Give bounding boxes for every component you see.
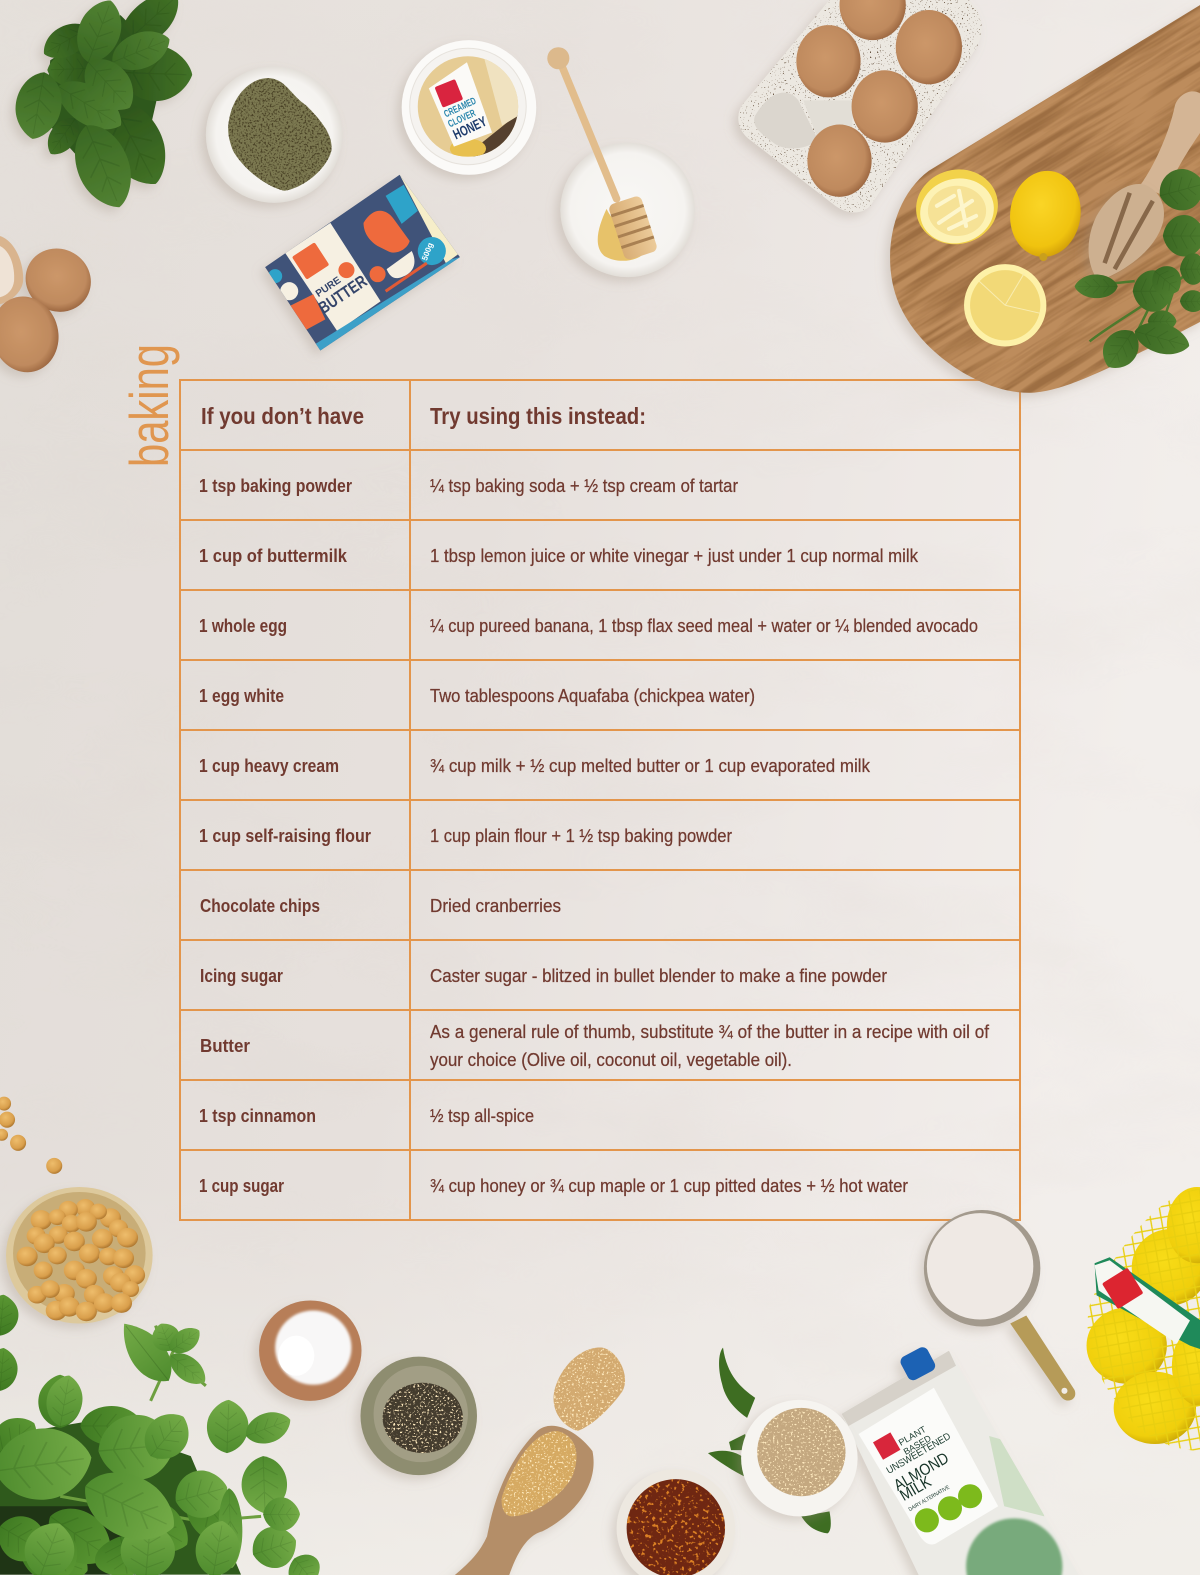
wooden citrus juicer	[1089, 91, 1200, 281]
row: egg white	[199, 686, 755, 706]
row: chocolate chips: Chocolate chips	[200, 896, 320, 916]
unsweetened almond milk carton: MILK	[897, 1472, 935, 1505]
substitution table	[180, 380, 1020, 1220]
creamed clover honey tub: CREAMED	[442, 96, 478, 120]
bowl of chilli flakes	[617, 1469, 735, 1575]
pure butter box: BUTTER	[315, 272, 371, 318]
unsweetened almond milk carton: PLANT	[897, 1424, 928, 1448]
row: self-raising flour: 1 cup plain flour + 1 ½ tsp baking powder	[430, 826, 732, 846]
row: sugar: 1 cup sugar	[199, 1176, 284, 1196]
unsweetened almond milk carton	[838, 1347, 1065, 1575]
row: whole egg	[199, 616, 978, 636]
row: buttermilk: 1 tbsp lemon juice or white vinegar + just under 1 cup normal milk	[430, 546, 919, 566]
squeezed lemon half	[908, 160, 1006, 253]
green chillies	[708, 1348, 831, 1533]
row: whole egg: ¼ cup pureed banana, 1 tbsp flax seed meal + water or ¼ blended avocado	[430, 616, 978, 636]
row: sugar	[199, 1176, 908, 1196]
row: butter: Butter	[200, 1036, 250, 1056]
row: whole egg: 1 whole egg	[199, 616, 287, 636]
row: butter	[200, 1022, 990, 1070]
unsweetened almond milk carton: ALMOND	[891, 1449, 952, 1495]
row: self-raising flour: 1 cup self-raising flour	[199, 826, 371, 846]
row: egg white: Two tablespoons Aquafaba (chickpea water)	[430, 686, 755, 706]
row: chocolate chips	[200, 896, 561, 916]
egg tray with five eggs	[738, 0, 982, 212]
vertical heading: baking: baking	[118, 344, 180, 467]
row: baking powder: ¼ tsp baking soda + ½ tsp cream of tartar	[430, 476, 738, 496]
row: chocolate chips: Dried cranberries	[430, 896, 561, 916]
cut lemon half	[964, 264, 1046, 346]
table header row: Try using this instead:	[430, 403, 646, 429]
row: cinnamon: 1 tsp cinnamon	[199, 1106, 316, 1126]
fresh mint plant	[0, 1293, 327, 1575]
basil bunch	[10, 0, 193, 217]
creamed clover honey tub: CLOVER	[447, 108, 478, 130]
table grid	[180, 380, 1020, 1220]
creamed clover honey tub: HONEY	[450, 113, 489, 142]
pure butter box	[265, 175, 460, 351]
row: baking powder: 1 tsp baking powder	[199, 476, 352, 496]
table header row	[201, 403, 646, 429]
coriander leaves	[1075, 164, 1200, 376]
row: sugar: ¾ cup honey or ¾ cup maple or 1 cup pitted dates + ½ hot water	[430, 1176, 908, 1196]
unsweetened almond milk carton: DAIRY ALTERNATIVE	[908, 1485, 951, 1513]
row: buttermilk	[199, 546, 919, 566]
row: heavy cream	[199, 756, 871, 776]
row: buttermilk: 1 cup of buttermilk	[199, 546, 348, 566]
wooden scoop with sugar	[447, 1347, 625, 1575]
eggs left edge	[0, 236, 103, 379]
row: icing sugar: Caster sugar - blitzed in bullet blender to make a fine powder	[430, 966, 887, 986]
bag of lemons in yellow net	[1087, 1187, 1200, 1451]
bowl of brown sugar	[741, 1400, 858, 1516]
honey dipper on white dish	[547, 47, 695, 277]
whole lemon	[1005, 166, 1086, 262]
wooden chopping board	[882, 5, 1200, 400]
table header row: If you don’t have	[201, 403, 364, 429]
row: cinnamon	[199, 1106, 534, 1126]
row: icing sugar: Icing sugar	[200, 966, 283, 986]
peppercorn bowl	[361, 1357, 477, 1475]
row: self-raising flour	[199, 826, 732, 846]
bowl of chickpeas	[6, 1187, 153, 1324]
row: heavy cream: ¾ cup milk + ½ cup melted butter or 1 cup evaporated milk	[430, 756, 871, 776]
plate of dried herbs	[206, 66, 342, 203]
salt bowl	[259, 1300, 362, 1401]
saucepan of milk	[924, 1210, 1075, 1401]
row: baking powder	[199, 476, 738, 496]
creamed clover honey tub	[402, 40, 536, 175]
unsweetened almond milk carton: BASED	[902, 1433, 933, 1457]
row: icing sugar	[200, 966, 887, 986]
stray chickpeas	[0, 1097, 62, 1174]
row: heavy cream: 1 cup heavy cream	[199, 756, 339, 776]
row: butter: your choice (Olive oil, coconut oil, vegetable oil).	[430, 1050, 792, 1070]
unsweetened almond milk carton: UNSWEETENED	[885, 1431, 953, 1477]
row: egg white: 1 egg white	[199, 686, 284, 706]
row: cinnamon: ½ tsp all-spice	[430, 1106, 534, 1126]
row: butter: As a general rule of thumb, substitute ¾ of the butter in a recipe with oil of	[430, 1022, 990, 1042]
pure butter box: 500g	[420, 241, 435, 262]
pure butter box: PURE	[314, 275, 343, 300]
